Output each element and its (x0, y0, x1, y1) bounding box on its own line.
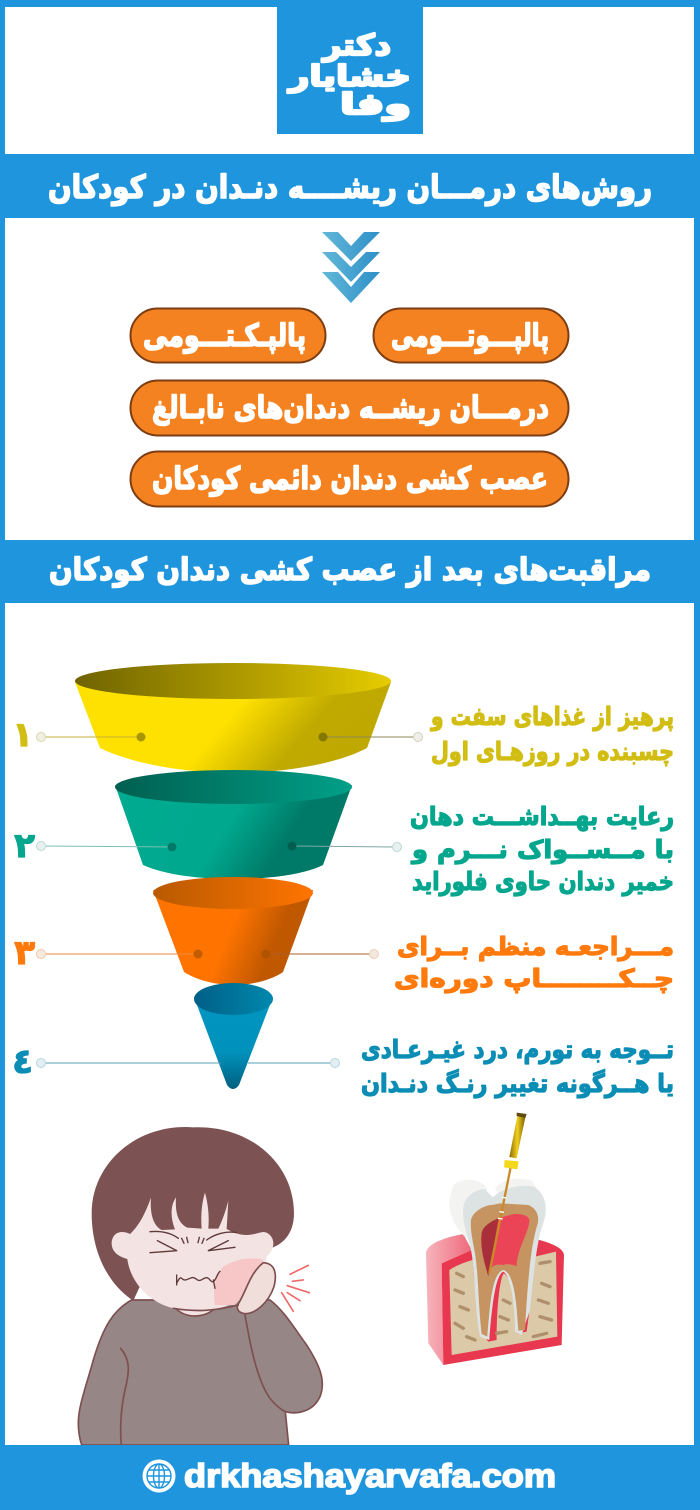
face (112, 1193, 273, 1311)
gum front face (442, 1238, 564, 1365)
enamel section (463, 1186, 546, 1340)
pill: permanent teeth of children (130, 452, 568, 506)
number 2: ٢ (14, 826, 35, 866)
sweater (78, 1300, 322, 1445)
logo: وفا (340, 87, 411, 121)
pill: pulpectomy (130, 308, 326, 362)
pill: pulpotomy: پالپـــوتـــومی (391, 318, 549, 354)
bone (449, 1252, 557, 1355)
website address: drkhashayarvafa.com (184, 1457, 556, 1494)
pulp left shade (481, 1218, 498, 1277)
icon: triple chevron arrow (322, 232, 380, 303)
text: item 3: چــکــــــــاپ دوره‌ای (394, 964, 674, 994)
callout lines: item 2 (36, 842, 402, 852)
callout lines: item 1 (36, 732, 422, 742)
jaw line (173, 1305, 238, 1311)
pill: immature teeth root canal: درمـــان ریشــه دندان‌های نابـالغ (152, 390, 549, 426)
gum side face (426, 1234, 472, 1365)
text: item 2: رعایت بهــداشـــت دهان (410, 802, 674, 832)
cheek redness (214, 1258, 263, 1305)
logo: دکتر (321, 28, 391, 62)
pain marks (282, 1265, 309, 1311)
illustration: tooth with endodontic file (426, 1113, 564, 1365)
funnel tier 2 teal (115, 770, 352, 879)
neck (177, 1309, 215, 1316)
pill: pulpotomy (374, 308, 568, 362)
number 3: ٣ (14, 933, 35, 973)
pill: permanent teeth of children: عصب کشی دندان دائمی کودکان (152, 461, 548, 497)
logo (277, 7, 423, 134)
hand (237, 1263, 275, 1314)
icon: globe (142, 1460, 176, 1492)
file handle (509, 1116, 525, 1158)
pill: pulpectomy: پالپـکـتـــومی (143, 318, 306, 354)
footer (0, 1445, 700, 1510)
heading: treatment methods (0, 154, 700, 218)
funnel tier 1 yellow (75, 663, 391, 773)
text: item 2 (410, 802, 674, 897)
pill: immature teeth root canal (130, 380, 568, 436)
number 1: ١ (12, 715, 33, 755)
file markings (498, 1197, 507, 1219)
illustration: child with toothache (78, 1127, 322, 1445)
crown back (449, 1179, 540, 1238)
bone texture (455, 1262, 552, 1340)
dentine (471, 1203, 538, 1337)
text: item 3: مـــراجعـه منظم بــرای (397, 932, 674, 962)
funnel tier 4 blue (194, 983, 273, 1089)
pulp (481, 1214, 529, 1277)
hair (92, 1127, 294, 1301)
text: item 3 (394, 932, 674, 994)
callout lines: item 3 (36, 950, 378, 958)
number 4: ٤ (12, 1042, 33, 1082)
callout lines: item 4 (36, 1058, 340, 1068)
heading: aftercare (0, 540, 700, 603)
text: item 1 (429, 702, 674, 767)
text: item 2: با مــســواک نـــرم و (410, 835, 674, 865)
funnel chart (75, 663, 391, 1089)
funnel tier 3 orange (153, 877, 313, 985)
face expression (150, 1231, 237, 1288)
text: item 4 (361, 1035, 674, 1099)
logo: خشایار (287, 59, 411, 93)
file shaft (489, 1167, 511, 1273)
